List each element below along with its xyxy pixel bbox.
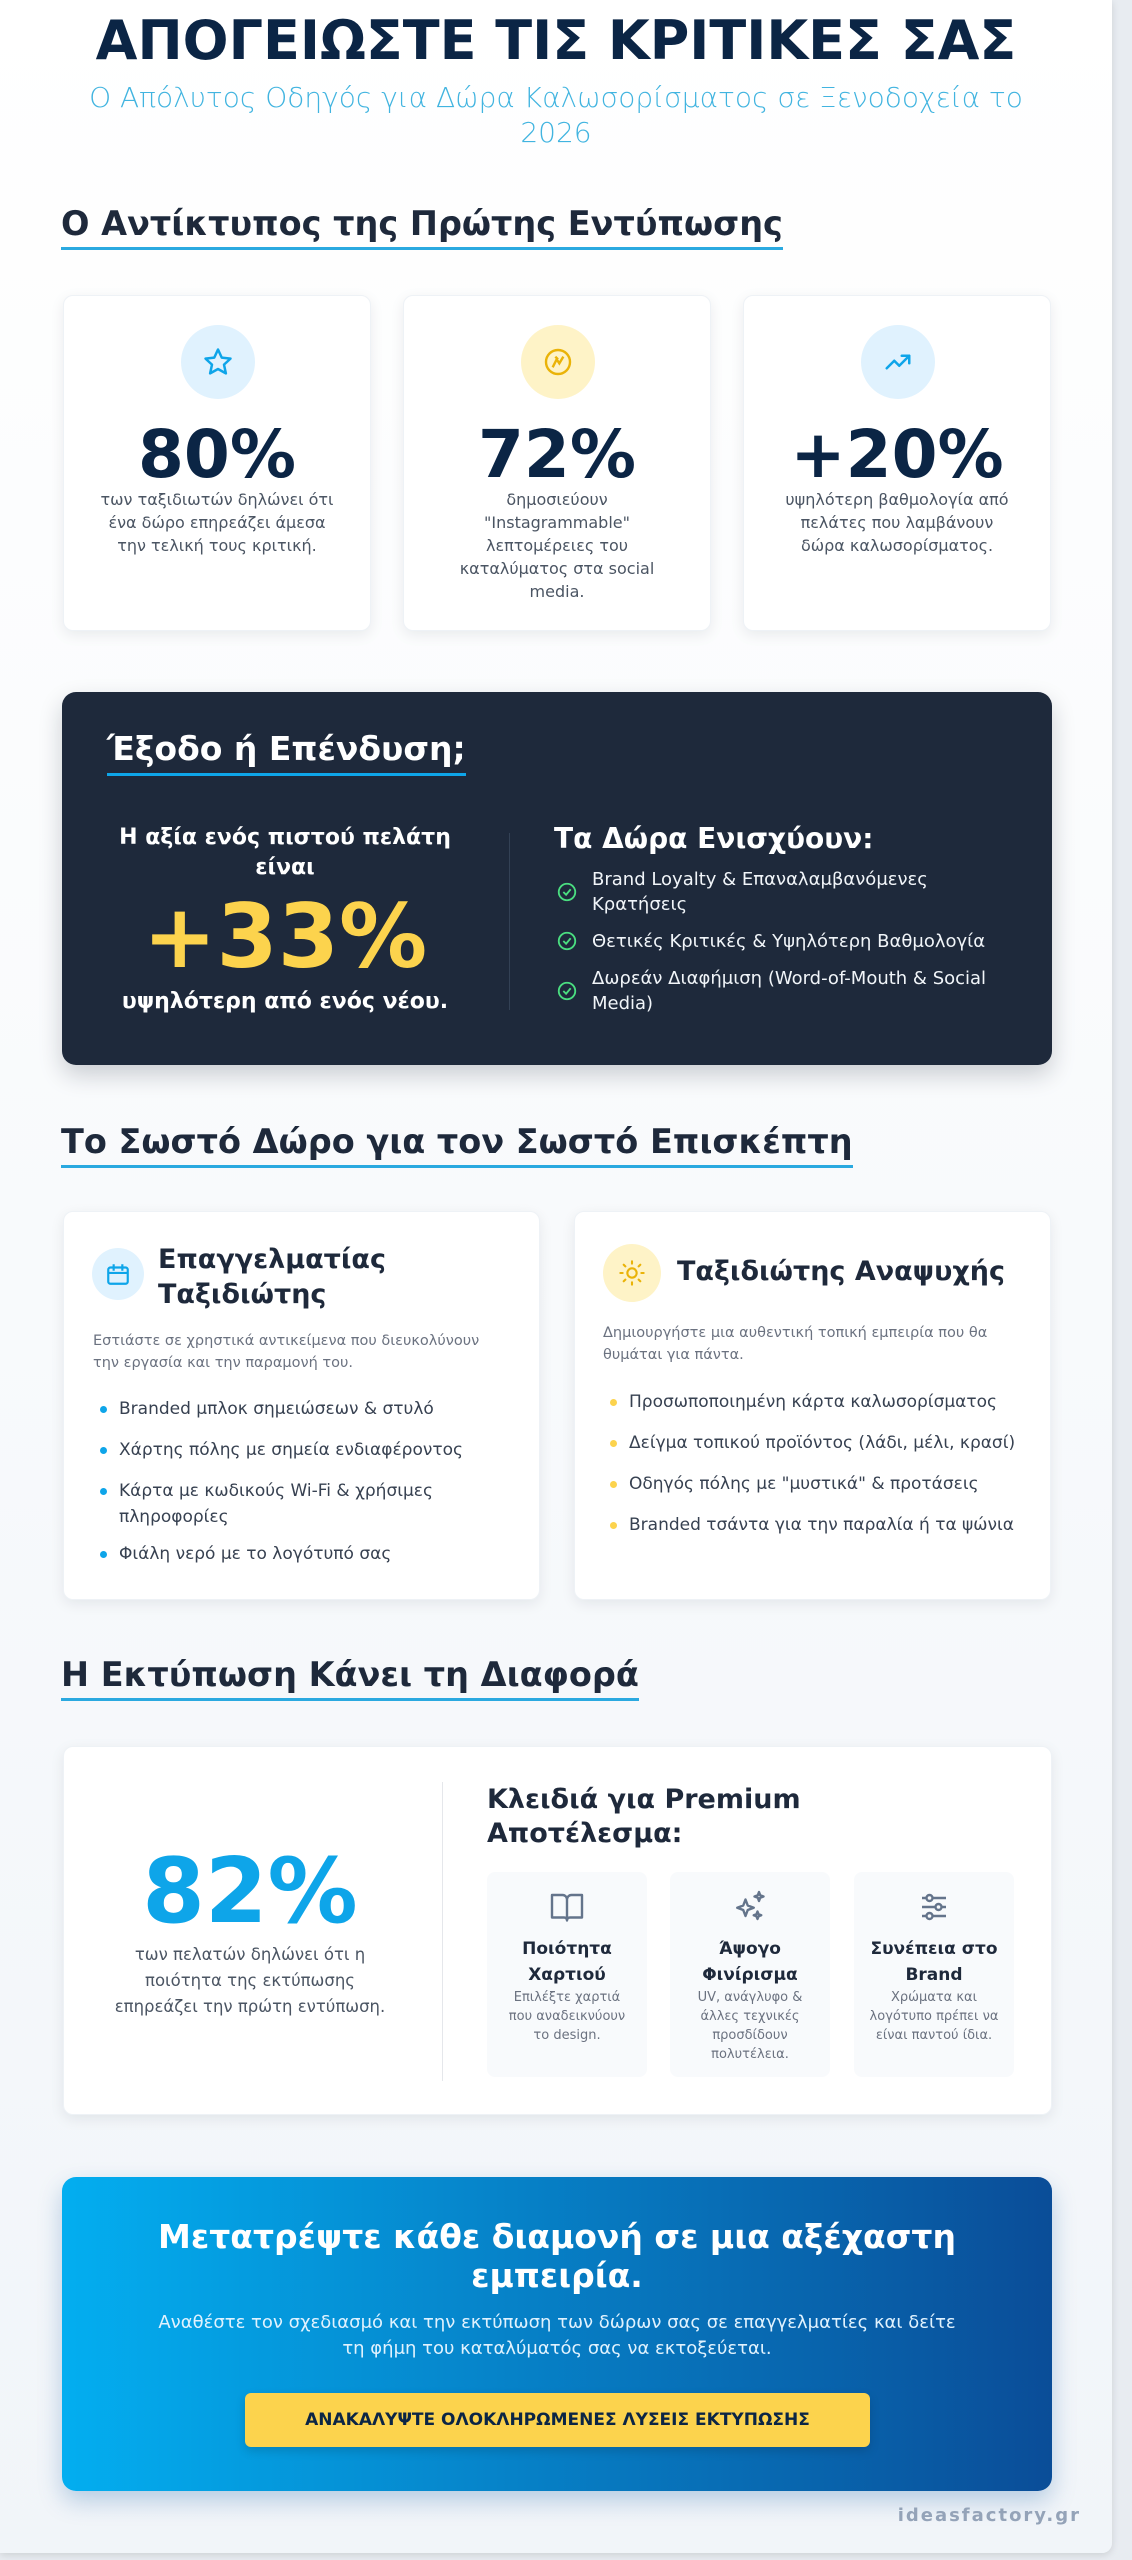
icon: trending up <box>861 325 935 399</box>
benefit 2: Θετικές Κριτικές & Υψηλότερη Βαθμολογία <box>592 931 985 952</box>
stat card: 72% <box>403 295 711 631</box>
heading: print makes difference: Η Εκτύπωση Κάνει τη Διαφορά <box>61 1655 639 1694</box>
key: brand consistency: Χρώματα και λογότυπο πρέπει να είναι παντού ίδια. <box>870 1990 998 2043</box>
key: finishing: UV, ανάγλυφο & άλλες τεχνικές προσδίδουν πολυτέλεια. <box>698 1990 802 2062</box>
card title <box>158 1244 386 1310</box>
bullet list: Προσωποποιημένη κάρτα καλωσορίσματος <box>629 1392 997 1412</box>
icon: book <box>550 1894 584 1922</box>
key: paper quality: Επιλέξτε χαρτιά που αναδεικνύουν το design. <box>509 1990 625 2043</box>
heading: first impression: Ο Αντίκτυπος της Πρώτης Εντύπωσης <box>61 204 783 243</box>
key: finishing: Άψογο <box>719 1939 781 1959</box>
stat 82% <box>115 1839 385 2016</box>
keys heading <box>487 1784 801 1849</box>
bullet list: Χάρτης πόλης με σημεία ενδιαφέροντος <box>119 1440 463 1460</box>
bullet list <box>610 1392 1015 1535</box>
CTA panel <box>62 2177 1052 2491</box>
description: δημοσιεύουν "Instagrammable" λεπτομέρειες του καταλύματος στα social media. <box>460 490 654 601</box>
panel heading: Έξοδο ή Επένδυση; <box>107 729 466 768</box>
bullet list: Branded μπλοκ σημειώσεων & στυλό <box>119 1399 434 1419</box>
card description: Εστιάστε σε χρηστικά αντικείμενα που διευκολύνουν την εργασία και την παραμονή του. <box>93 1333 479 1371</box>
key: finishing <box>670 1872 830 2077</box>
description: των ταξιδιωτών δηλώνει ότι ένα δώρο επηρεάζει άμεσα την τελική τους κριτική. <box>101 490 333 555</box>
CTA button: ΑΝΑΚΑΛΥΨΤΕ ΟΛΟΚΛΗΡΩΜΕΝΕΣ ΛΥΣΕΙΣ ΕΚΤΥΠΩΣΗΣ <box>305 2410 810 2430</box>
key: paper quality: Χαρτιού <box>528 1965 606 1985</box>
number: 80% <box>138 416 296 493</box>
divider <box>442 1782 443 2081</box>
key: brand consistency: Brand <box>905 1965 963 1985</box>
number: +20% <box>790 416 1004 493</box>
stat 82%: των πελατών δηλώνει ότι η ποιότητα της εκτύπωσης επηρεάζει την πρώτη εντύπωση. <box>115 1945 385 2016</box>
card description: Δημιουργήστε μια αυθεντική τοπική εμπειρία που θα θυμάται για πάντα. <box>603 1325 987 1363</box>
benefits list <box>554 822 986 1014</box>
CTA text: Αναθέστε τον σχεδιασμό και την εκτύπωση των δώρων σας σε επαγγελματίες και δείτε τη φήμη του καταλύματός σας να εκτοξεύεται. <box>158 2312 956 2359</box>
key: brand consistency <box>854 1872 1014 2077</box>
keys heading: Κλειδιά για Premium <box>487 1784 801 1815</box>
icon: sun <box>603 1244 661 1302</box>
key: brand consistency: Συνέπεια στο <box>870 1939 998 1959</box>
icon: sparkles <box>736 1890 765 1920</box>
left stat block: Η αξία ενός πιστού πελάτη είναι <box>119 825 451 880</box>
card title: Ταξιδιώτης <box>158 1279 326 1310</box>
card: business traveler <box>63 1211 540 1600</box>
subtitle: Ο Απόλυτος Οδηγός για Δώρα Καλωσορίσματος σε Ξενοδοχεία το 2026 <box>89 81 1023 149</box>
divider <box>509 833 510 1010</box>
left stat block <box>119 825 451 1014</box>
key: finishing: Φινίρισμα <box>702 1965 798 1985</box>
card: leisure traveler <box>574 1211 1051 1600</box>
benefit 3: Δωρεάν Διαφήμιση (Word-of-Mouth & Social Media) <box>592 968 986 1014</box>
icon: camera <box>521 325 595 399</box>
number: 72% <box>478 416 636 493</box>
icon: star <box>181 325 255 399</box>
bullet list: Δείγμα τοπικού προϊόντος (λάδι, μέλι, κρασί) <box>629 1433 1015 1453</box>
key: paper quality <box>487 1872 647 2077</box>
CTA headline: Μετατρέψτε κάθε διαμονή σε μια αξέχαστη εμπειρία. <box>158 2217 956 2295</box>
benefits list: Τα Δώρα Ενισχύουν: <box>554 822 873 855</box>
bullet list: Οδηγός πόλης με "μυστικά" & προτάσεις <box>629 1474 979 1494</box>
left stat block: υψηλότερη από ενός νέου. <box>122 989 448 1014</box>
key: paper quality: Ποιότητα <box>522 1939 612 1959</box>
stat card: 80% <box>63 295 371 631</box>
icon: sliders <box>922 1894 946 1920</box>
footer brand: ideasfactory.gr <box>898 2505 1081 2526</box>
bullet list: Κάρτα με κωδικούς Wi-Fi & χρήσιμες πληροφορίες <box>119 1481 433 1527</box>
card title: Επαγγελματίας <box>158 1244 386 1275</box>
bullet list: Branded τσάντα για την παραλία ή τα ψώνια <box>629 1515 1014 1535</box>
stat card: +20% <box>743 295 1051 631</box>
left stat block: +33% <box>143 885 427 988</box>
CTA button <box>245 2393 870 2447</box>
keys heading: Αποτέλεσμα: <box>487 1818 682 1849</box>
panel: cost or investment <box>62 692 1052 1065</box>
stat 82%: 82% <box>142 1839 358 1944</box>
description: υψηλότερη βαθμολογία από πελάτες που λαμβάνουν δώρα καλωσορίσματος. <box>785 490 1009 555</box>
title: ΑΠΟΓΕΙΩΣΤΕ ΤΙΣ ΚΡΙΤΙΚΕΣ ΣΑΣ <box>96 9 1016 72</box>
panel: print quality <box>63 1746 1052 2115</box>
bullet list: Φιάλη νερό με το λογότυπό σας <box>119 1544 391 1564</box>
heading: right gift: Το Σωστό Δώρο για τον Σωστό Επισκέπτη <box>61 1122 853 1161</box>
icon: briefcase <box>92 1248 144 1300</box>
benefit 1: Brand Loyalty & Επαναλαμβανόμενες Κρατήσεις <box>592 869 928 915</box>
bullet list <box>100 1399 463 1564</box>
card title: Ταξιδιώτης Αναψυχής <box>677 1256 1005 1287</box>
